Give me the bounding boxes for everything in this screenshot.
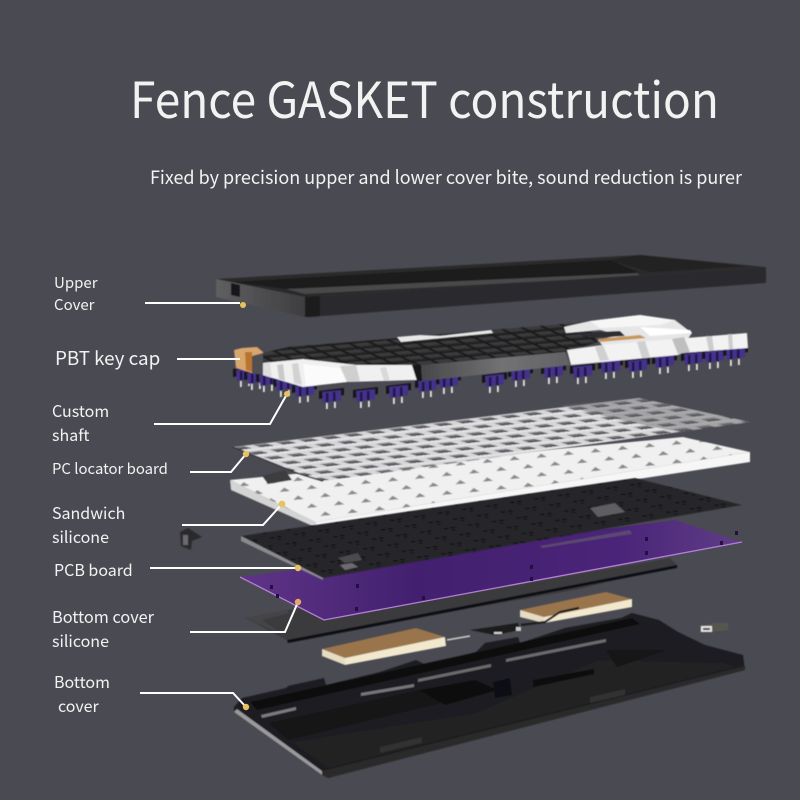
white key caps left front <box>263 359 417 387</box>
label: Upper Cover: Upper <box>54 272 98 293</box>
label: Bottom cover <box>54 669 110 717</box>
label: PBT key cap: PBT key cap <box>55 344 160 371</box>
layer: PBT key caps and custom switches <box>233 315 748 409</box>
label: Bottom cover silicone: Bottom cover <box>52 604 155 628</box>
layer: upper cover <box>216 255 766 317</box>
leader: Custom shaft <box>154 391 290 424</box>
label: Sandwich silicone: silicone <box>52 524 109 548</box>
leader: Sandwich silicone <box>182 501 285 525</box>
layer: PC locator board <box>233 398 750 481</box>
leader: PCB board <box>150 565 301 571</box>
title: Fence GASKET construction <box>130 62 719 133</box>
tabs <box>380 737 422 753</box>
light gaps <box>261 707 296 718</box>
compartments <box>269 690 445 740</box>
white key caps right front <box>567 333 748 365</box>
battery right <box>520 592 632 625</box>
label: Bottom cover: Bottom <box>54 669 110 693</box>
label: Custom shaft: Custom <box>52 398 109 422</box>
leader: Bottom cover silicone <box>190 599 301 632</box>
label: Bottom cover silicone: silicone <box>52 628 109 652</box>
layer: sandwich silicone <box>230 437 750 528</box>
label: Custom shaft: shaft <box>52 422 89 446</box>
label: Upper Cover <box>54 272 98 315</box>
label: Upper Cover: Cover <box>54 294 95 315</box>
leader: PC locator board <box>190 451 249 472</box>
connector board <box>447 623 521 640</box>
label: PCB board: PCB board <box>54 557 133 581</box>
battery left <box>322 628 446 665</box>
USB receiver <box>700 623 728 632</box>
layer: purple plate <box>240 520 742 620</box>
layer: batteries and USB receiver <box>322 592 728 665</box>
label: Bottom cover silicone <box>52 604 155 652</box>
layer: PCB board <box>241 478 742 580</box>
label: Custom shaft <box>52 398 109 446</box>
layer: bottom cover silicone <box>245 558 677 643</box>
floor <box>292 660 736 768</box>
label: Bottom cover: cover <box>58 693 100 717</box>
orange key cap <box>234 347 263 373</box>
leader: Bottom cover <box>140 693 249 710</box>
leader: Upper Cover <box>145 302 246 308</box>
label: Sandwich silicone: Sandwich <box>52 500 125 524</box>
leader: PBT key cap <box>177 358 240 360</box>
label: Sandwich silicone <box>52 500 125 548</box>
custom shaft switches <box>233 345 748 409</box>
small clip part <box>180 528 202 550</box>
subtitle: Fixed by precision upper and lower cover bite, sound reduction is purer <box>150 164 743 190</box>
label: PC locator board: PC locator board <box>52 458 168 479</box>
white key caps right back <box>564 315 692 353</box>
dark key caps <box>263 322 598 365</box>
back rail <box>250 618 640 710</box>
space bar <box>421 352 570 381</box>
layer: bottom cover <box>234 613 745 778</box>
white key row back <box>397 330 493 342</box>
side edge <box>234 709 322 775</box>
